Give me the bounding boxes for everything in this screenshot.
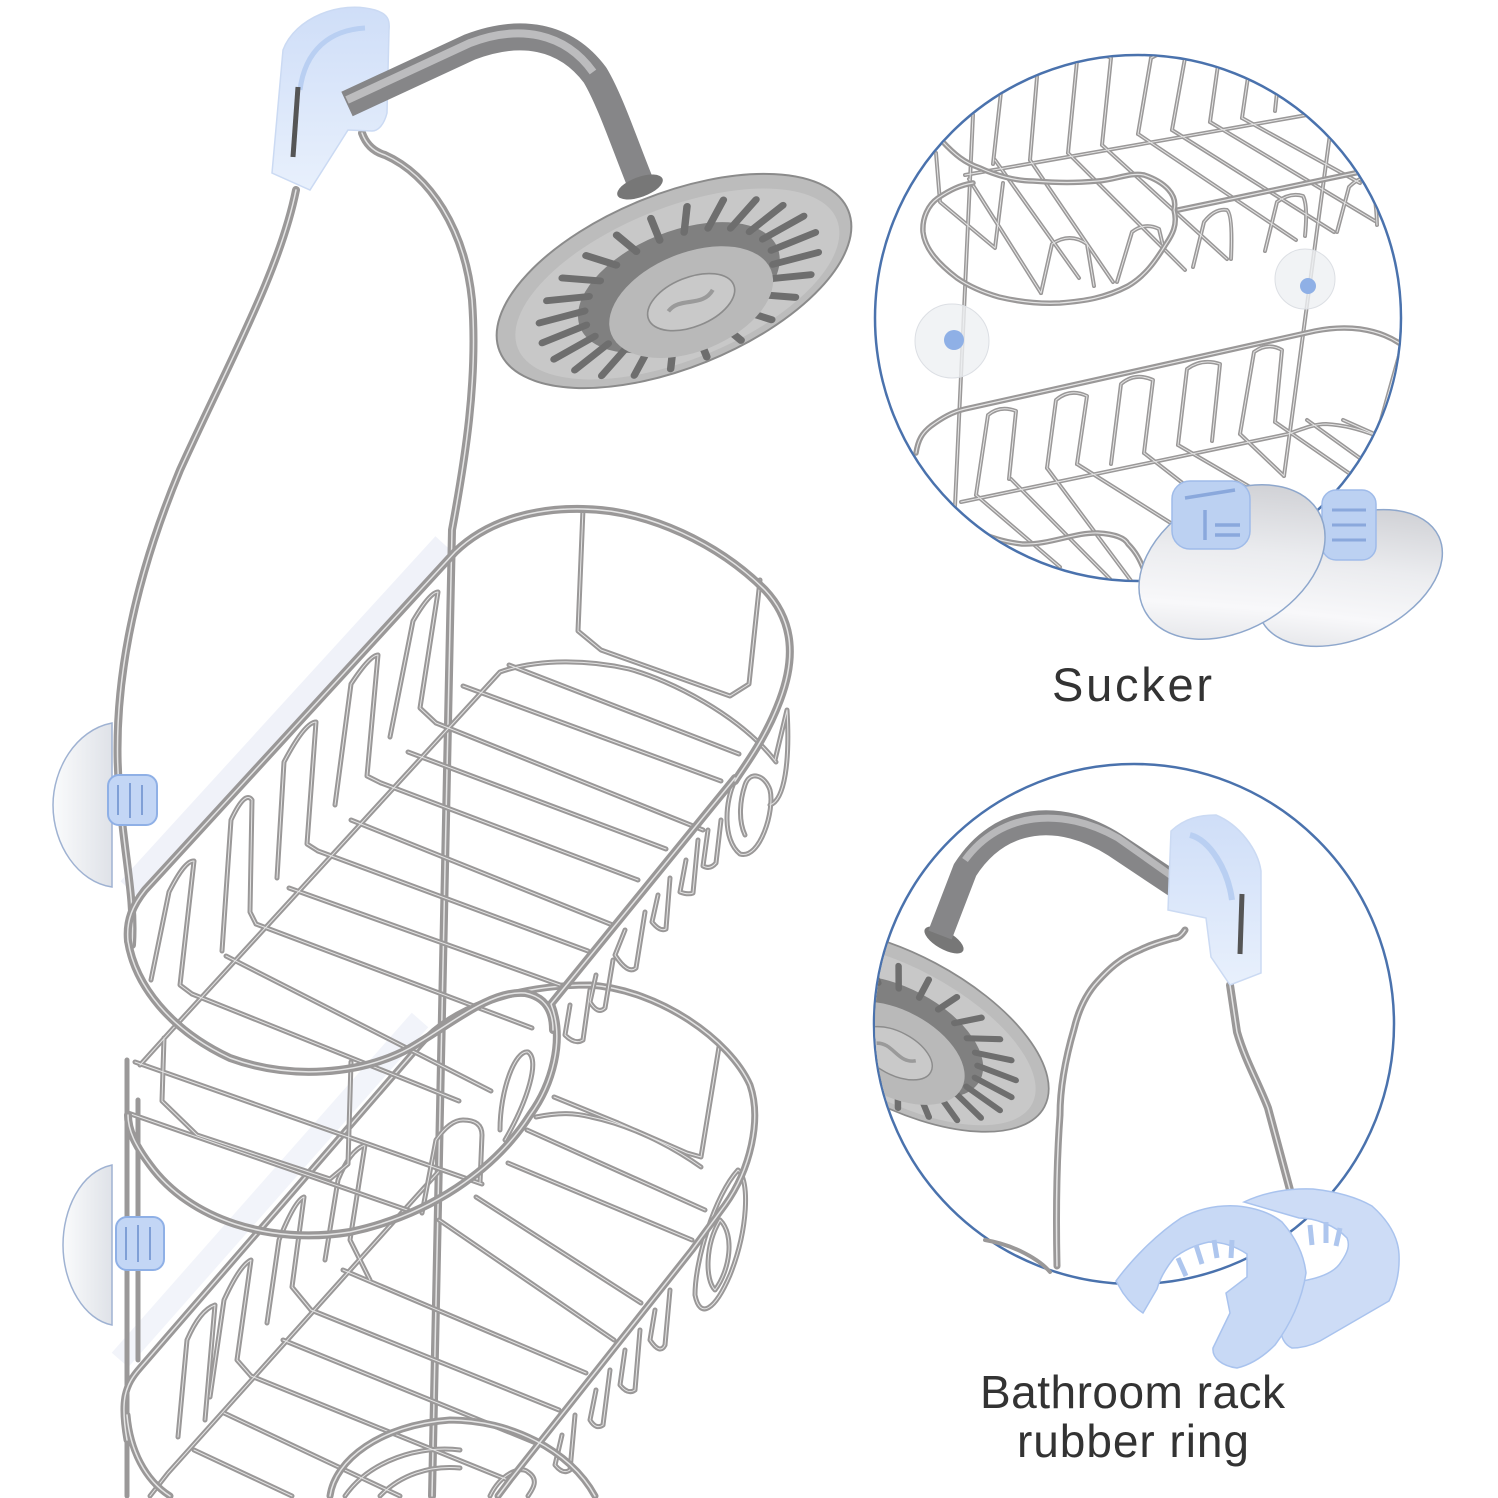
rubber ring front: [1116, 1206, 1306, 1368]
inset circle: [874, 764, 1394, 1284]
lower basket: [124, 985, 755, 1496]
wire left close-up: [1056, 930, 1185, 1266]
hanging wire right: [362, 133, 474, 1496]
label: rubber ring: [980, 1366, 1286, 1467]
panel: rubber ring inset: [872, 762, 1400, 1369]
panel: sucker inset: [875, 53, 1464, 674]
rubber ring clip: [272, 7, 389, 190]
rubber ring back: [1244, 1189, 1399, 1348]
close-up suction cup front: [1111, 453, 1353, 671]
wire right close-up: [1230, 985, 1290, 1190]
suction cup lower: [63, 1165, 164, 1325]
label: sucker: Sucker: [1052, 658, 1212, 711]
shelf wires close-up: [916, 53, 1402, 582]
rim wire at circle edge: [985, 1240, 1050, 1272]
small sucker left: [915, 304, 989, 378]
small sucker right: [1275, 249, 1335, 309]
shower head close-up: [875, 926, 1050, 1133]
shower arm close-up: [940, 818, 1205, 935]
label: rubber ring: Bathroom rack: [980, 1366, 1286, 1418]
hanging wire left: [118, 190, 296, 945]
inset circle: [875, 55, 1401, 581]
suction cup upper: [53, 723, 157, 887]
close-up suction cup back: [1236, 482, 1464, 674]
rubber clip close-up: [1168, 815, 1261, 985]
left support pole: [127, 1060, 138, 1496]
panel: main product photo: [53, 7, 881, 1496]
shower head: [467, 130, 881, 432]
shower arm: [347, 33, 640, 182]
upper basket: [128, 509, 790, 1235]
label: rubber ring: rubber ring: [1017, 1415, 1249, 1467]
